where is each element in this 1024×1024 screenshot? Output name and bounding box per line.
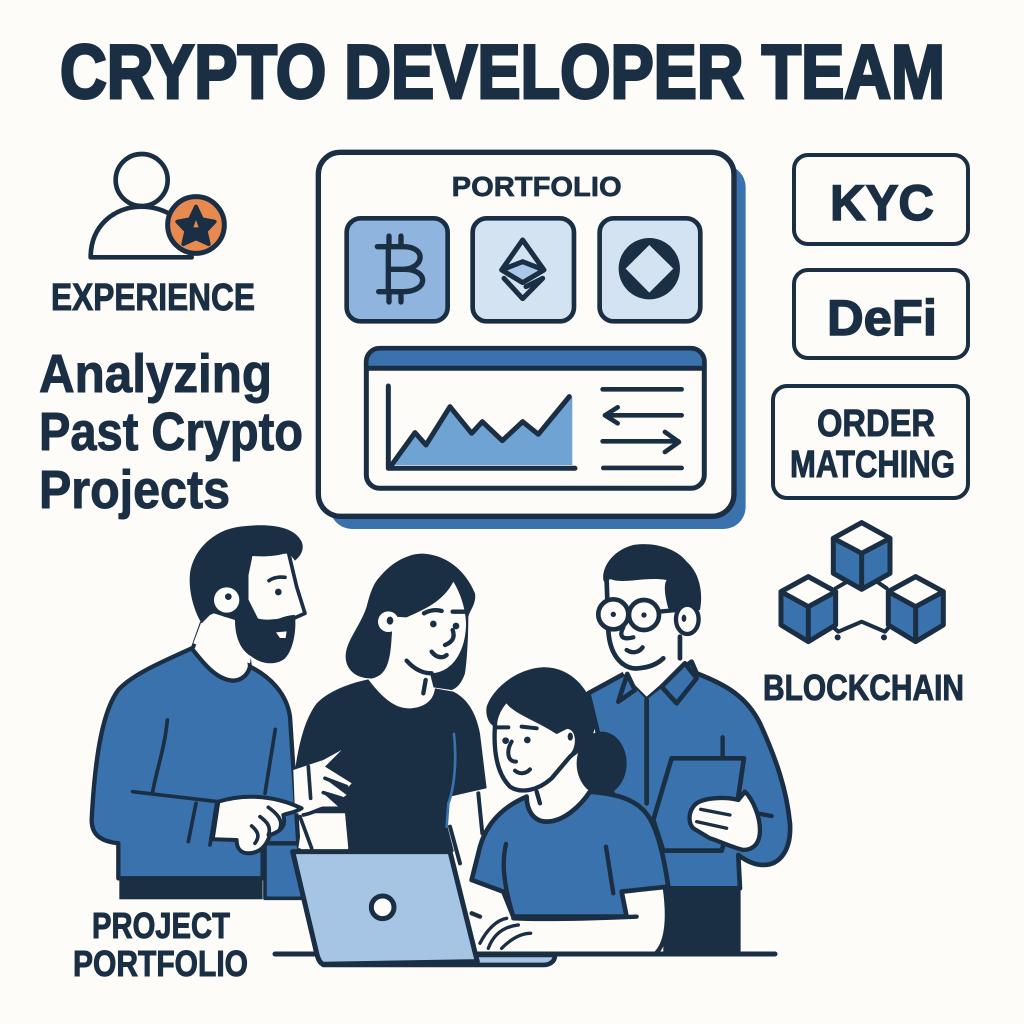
panel heading: PORTFOLIO [452,171,622,202]
badge: KYC [794,155,968,244]
laptop [293,852,555,965]
area chart [388,386,575,468]
panel card [318,152,734,516]
icon: experience user with star badge [91,154,224,257]
icon: blockchain cubes [781,523,943,642]
label: project portfolio: PORTFOLIO [73,943,248,984]
panel shadow [330,165,746,529]
badge: DeFi [794,270,968,358]
badge: order matching: ORDER [817,403,935,445]
text block: analyzing past crypto projects: Analyzing [39,344,272,404]
text block: analyzing past crypto projects [39,344,303,520]
panel: portfolio [318,152,746,529]
badge: order matching: MATCHING [790,444,955,486]
tile: bitcoin [347,218,448,321]
label: blockchain: BLOCKCHAIN [763,667,964,708]
tile: diamond coin [600,218,700,321]
label: experience: EXPERIENCE [51,277,255,319]
person: bearded man [92,525,352,899]
label: project portfolio: PROJECT [92,905,230,946]
person: seated woman typing [472,667,668,954]
badge: DeFi: DeFi [827,290,937,346]
text block: analyzing past crypto projects: Projects [39,460,230,520]
badge: order matching [773,386,968,498]
illustration: team [92,525,790,965]
label: project portfolio [73,905,248,984]
tile: ethereum [473,218,574,321]
desk line [275,952,775,956]
chart window [366,348,704,488]
person: woman in dark shirt [295,554,487,863]
text block: analyzing past crypto projects: Past Crypto [39,402,303,462]
badge: KYC: KYC [830,175,934,231]
person: standing man with glasses and tablet [588,544,790,953]
order arrows [603,389,682,468]
